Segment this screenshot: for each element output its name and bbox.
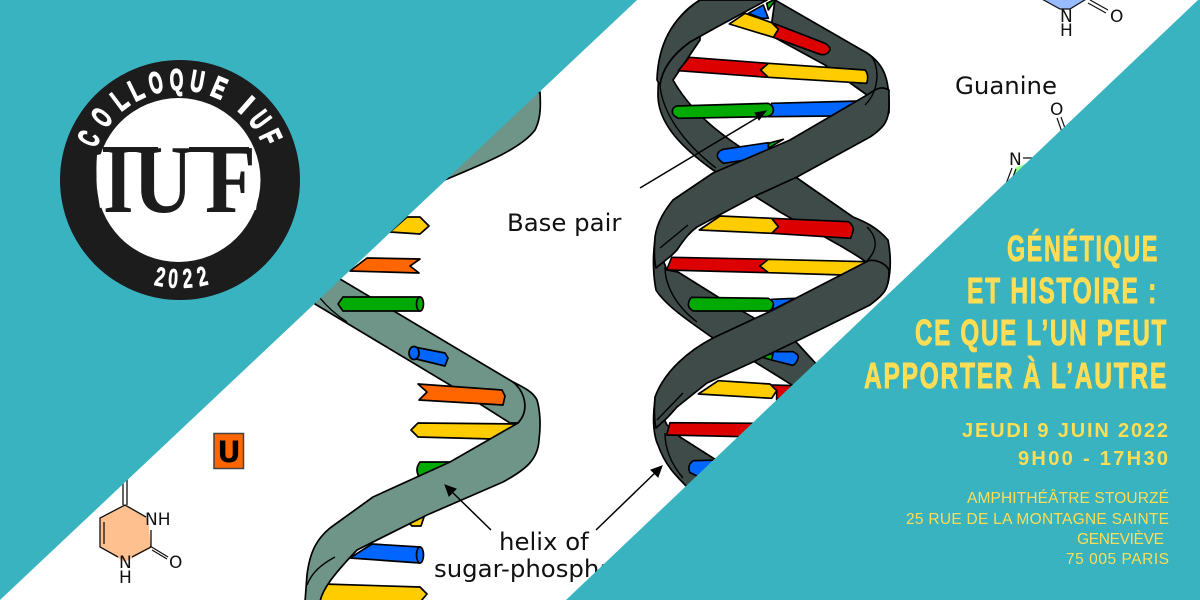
logo arc text: 2022: 2 xyxy=(182,262,194,294)
label: Base pair: Base pair xyxy=(507,208,622,237)
text: date and time: JEUDI 9 JUIN 2022 xyxy=(962,420,1168,442)
label: Guanine: Guanine xyxy=(955,71,1057,100)
molecule: top blue base: O xyxy=(1110,7,1123,27)
molecule: top blue base xyxy=(1040,0,1123,41)
logo letters IUF xyxy=(103,125,256,234)
logo arc text: COLLOQUE IUF: O xyxy=(145,66,167,101)
logo arc text: 2022: 0 xyxy=(167,263,179,294)
grey helix rungs xyxy=(316,217,518,600)
logo arc text: COLLOQUE IUF: L xyxy=(105,84,135,117)
panel: teal top-left triangle xyxy=(0,0,637,600)
text: date and time xyxy=(962,420,1168,470)
molecule: guanine: O xyxy=(1050,100,1063,120)
logo letters IUF: U xyxy=(133,125,193,234)
logo arc text: 2022 xyxy=(152,260,210,294)
molecule: guanine xyxy=(1006,100,1066,185)
text: venue address: 25 RUE DE LA MONTAGNE SAINTE xyxy=(906,511,1169,528)
molecule: uracil: N xyxy=(119,553,132,573)
text: venue address: 75 005 PARIS xyxy=(1066,551,1169,568)
logo arc text: 2022: 2 xyxy=(152,260,168,293)
logo arc text: COLLOQUE IUF: U xyxy=(242,105,277,136)
panel: teal bottom-right triangle xyxy=(566,0,1200,600)
dark DNA helix xyxy=(653,0,890,530)
logo letters IUF: F xyxy=(205,125,256,234)
logo arc text: COLLOQUE IUF: I xyxy=(232,90,260,121)
dark helix rungs xyxy=(672,0,868,238)
molecule: uracil: NH xyxy=(145,510,170,530)
heading: event title xyxy=(864,228,1168,396)
arrow: right helix xyxy=(596,466,662,530)
label: helix of sugar-phosphate: helix of xyxy=(499,527,590,556)
label: helix of sugar-phosphate xyxy=(434,527,639,583)
logo arc text: COLLOQUE IUF xyxy=(72,64,287,152)
logo arc text: COLLOQUE IUF: C xyxy=(72,126,107,152)
logo arc text: COLLOQUE IUF: O xyxy=(85,102,120,134)
logo arc text: COLLOQUE IUF: Q xyxy=(169,64,184,98)
molecule: uracil: O xyxy=(169,553,182,573)
label: helix of sugar-phosphate: sugar-phosphate xyxy=(434,554,639,583)
arrow: helix xyxy=(445,485,491,530)
molecule: uracil xyxy=(100,478,182,588)
dark helix lower rungs xyxy=(667,257,867,477)
text: date and time: 9H00 - 17H30 xyxy=(1018,448,1168,470)
icon: uracil badge: U xyxy=(217,435,241,469)
logo arc text: COLLOQUE IUF: L xyxy=(124,73,149,108)
logo arc text: COLLOQUE IUF: F xyxy=(252,125,287,150)
logo arc text: COLLOQUE IUF: U xyxy=(188,64,207,100)
logo arc text: COLLOQUE IUF: E xyxy=(206,71,231,106)
logo letters IUF: I xyxy=(103,126,134,234)
molecule: top blue base: N xyxy=(1060,7,1073,27)
text: venue address xyxy=(906,490,1169,568)
grey DNA helix xyxy=(300,92,540,600)
text: venue address: AMPHITHÉÂTRE STOURZÉ xyxy=(967,490,1169,507)
text: venue address: GENEVIÈVE xyxy=(1077,531,1164,548)
logo arc text: 2022: 2 xyxy=(194,260,210,292)
molecule: top blue base: H xyxy=(1060,21,1073,41)
molecule: uracil: H xyxy=(119,568,132,588)
molecule: guanine: N xyxy=(1009,150,1022,170)
logo: Colloque IUF 2022 xyxy=(60,60,300,300)
arrow: base pair xyxy=(640,111,766,188)
